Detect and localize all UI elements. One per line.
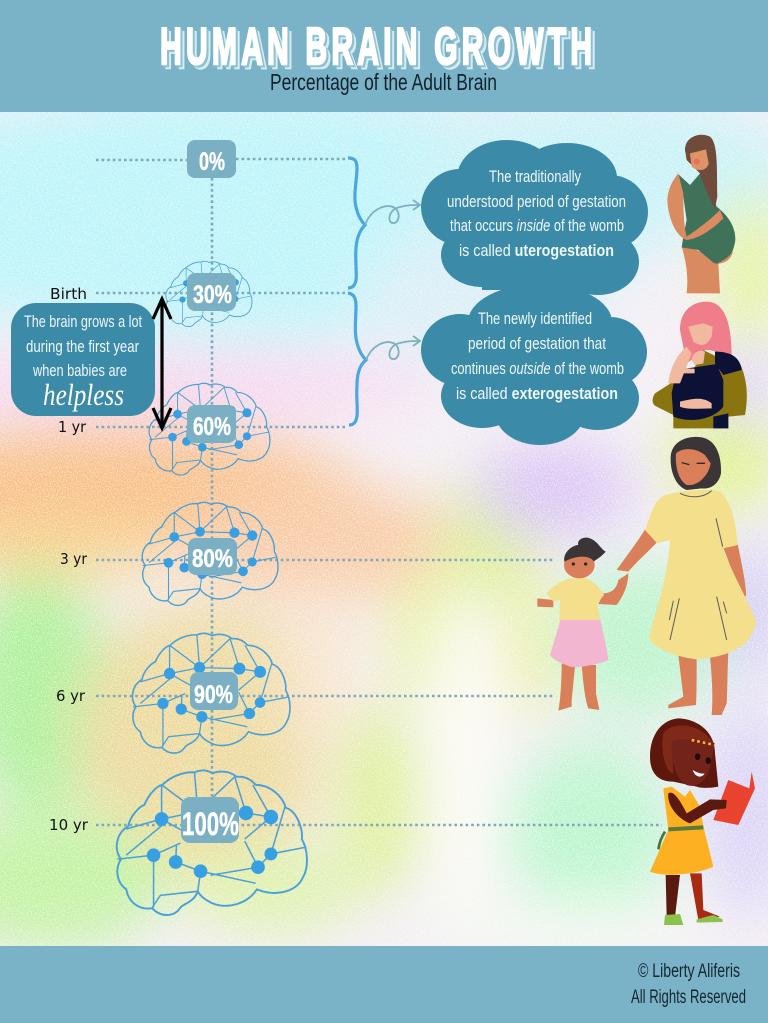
badge: 100% [181, 797, 239, 843]
illustration: mother carrying baby [653, 302, 747, 428]
badge: 90%: 90% [194, 681, 233, 709]
title: HUMAN BRAIN GROWTH [164, 23, 596, 80]
cloud: uterogestation: is called uterogestation [459, 241, 614, 260]
timeline dotted lines [96, 159, 662, 825]
footer band [0, 946, 768, 1023]
callout: first year [11, 303, 155, 416]
brace: exterogestation [348, 293, 366, 425]
brain: 10 yr [117, 770, 307, 915]
badge: 100%: 100% [182, 806, 239, 842]
age labels [49, 285, 89, 834]
cloud: exterogestation: The newly identified [478, 309, 592, 328]
callout: first year: The brain grows a lot [24, 312, 142, 331]
cloud: exterogestation [421, 284, 647, 445]
age labels: 1 yr [58, 418, 87, 436]
illustration: girl reading [650, 718, 755, 925]
cloud: exterogestation: continues outside of the womb [451, 359, 624, 378]
age labels: 10 yr [49, 816, 89, 834]
brain: 3 yr [142, 502, 278, 605]
badge: 60% [187, 405, 236, 443]
header band [0, 0, 768, 112]
title: HUMAN BRAIN GROWTH [160, 19, 592, 76]
brain: birth [166, 261, 252, 327]
badge: 90% [190, 672, 238, 710]
callout: first year: helpless [43, 377, 124, 412]
curly arrow: to exterogestation [366, 336, 420, 360]
credit [631, 961, 746, 1008]
age labels: 6 yr [56, 687, 86, 705]
brain: 1 yr [149, 383, 270, 475]
brace: uterogestation [348, 158, 365, 288]
illustration: pregnant woman [667, 135, 735, 293]
title: HUMAN BRAIN GROWTH [162, 21, 594, 78]
cloud: uterogestation: that occurs inside of the womb [450, 216, 624, 235]
age labels: 3 yr [60, 550, 88, 568]
cloud: uterogestation: The traditionally [489, 167, 581, 186]
badge: 30% [187, 273, 236, 311]
badge: 0% [187, 140, 236, 178]
illustration: mother and child [537, 437, 756, 715]
callout: first year: when babies are [32, 361, 127, 380]
age labels: Birth [50, 285, 87, 303]
callout: first year: during the first year [26, 337, 139, 356]
badge: 30%: 30% [193, 281, 232, 309]
badge: 0%: 0% [199, 148, 225, 176]
curly arrow: to uterogestation [365, 200, 420, 225]
cloud: exterogestation: period of gestation that [468, 334, 606, 353]
subtitle: Percentage of the Adult Brain [270, 69, 497, 95]
badge: 60%: 60% [193, 413, 231, 441]
cloud: uterogestation [421, 140, 648, 295]
badge: 80% [188, 538, 237, 575]
cloud: uterogestation: understood period of gestation [447, 192, 626, 211]
badge: 80%: 80% [192, 545, 233, 573]
cloud: exterogestation: is called exterogestation [456, 384, 618, 403]
arrow: double-headed [153, 299, 171, 428]
brain: 6 yr [132, 633, 290, 753]
